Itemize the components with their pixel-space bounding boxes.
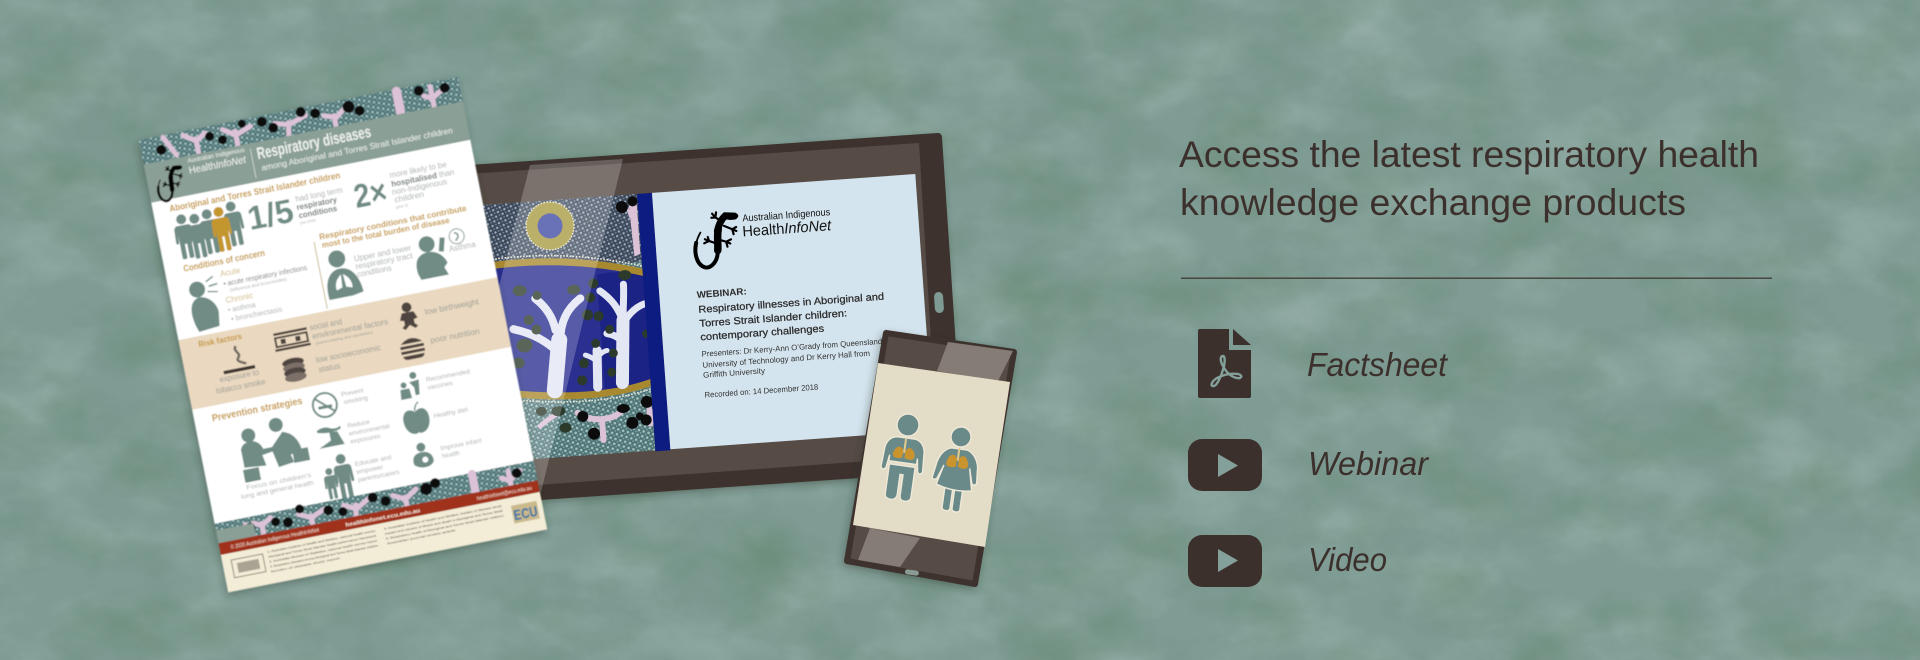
moon circle	[524, 200, 576, 252]
flyer prevention strategies section: Healthy diet	[433, 406, 469, 420]
flyer risk factors band: status	[318, 361, 341, 374]
flyer statistics section: 2×	[351, 172, 390, 215]
tablet glare	[445, 159, 623, 498]
flyer risk factors band: low birthweight	[424, 297, 480, 317]
icon: health consultation	[234, 413, 312, 483]
flyer risk factors band: exposure to	[219, 368, 260, 384]
group of five children	[170, 200, 249, 262]
lungs	[946, 446, 970, 469]
slide logo: HealthInfoNet	[742, 217, 833, 241]
flyer burden of disease section: conditions	[356, 264, 392, 279]
flyer title: Respiratory diseases	[255, 122, 373, 163]
icon: cigarette	[219, 343, 255, 374]
flyer bottom art strip	[214, 458, 538, 544]
slide webinar title: Torres Strait Islander children:	[699, 308, 847, 330]
slide webinar title: WEBINAR:	[696, 286, 747, 301]
flyer burden of disease section	[312, 202, 483, 309]
phone glare top	[937, 342, 1013, 381]
ECU logo: ECU	[512, 503, 539, 524]
label: Factsheet: Factsheet	[1307, 346, 1449, 383]
label: Webinar: Webinar	[1308, 445, 1430, 482]
flyer statistics section: conditions	[298, 204, 338, 220]
flyer top art strip	[139, 76, 463, 165]
factsheet flyer	[139, 76, 547, 592]
lungs	[892, 437, 917, 460]
slide logo: Australian Indigenous	[742, 207, 831, 225]
flyer references panel	[221, 492, 547, 592]
label: Video: Video	[1308, 541, 1387, 578]
flyer conditions of concern section: (influenza and bronchiolitis)	[229, 276, 288, 293]
heading	[1179, 134, 1759, 223]
flyer prevention strategies section: empower	[356, 464, 385, 476]
flyer statistics section: 1/5	[244, 192, 297, 237]
flyer risk factors band: poor nutrition	[430, 327, 480, 345]
phone home button	[905, 569, 919, 576]
flyer risk factors band: Risk factors	[198, 331, 243, 349]
slide presenters: Recorded on: 14 December 2018	[704, 383, 819, 400]
flyer risk factors band: tobacco smoke	[215, 377, 267, 396]
flyer prevention strategies section: vaccines	[427, 380, 454, 392]
figure: girl with lungs	[928, 424, 984, 514]
icon: play button for webinar	[1188, 439, 1262, 491]
flyer references panel: Aboriginal and Torres Strait Islander health performance framework	[268, 533, 377, 559]
flyer statistics section: hospitalised than	[391, 168, 455, 189]
flyer prevention strategies section: Prevention strategies	[211, 396, 304, 425]
slide webinar title: Respiratory illnesses in Aboriginal and	[698, 292, 884, 316]
flyer prevention strategies section: Educate and	[354, 454, 392, 468]
flyer conditions of concern section: Conditions of concern	[182, 248, 266, 275]
slide presenters: Griffith University	[703, 366, 765, 380]
flyer burden of disease section: most to the total burden of disease	[321, 215, 451, 250]
flyer prevention strategies section: Recommended	[425, 368, 471, 384]
flyer statistics section	[168, 148, 461, 262]
icon: crowded housing	[272, 327, 311, 352]
slide webinar title: contemporary challenges	[700, 324, 825, 343]
flyer logo	[153, 148, 252, 202]
divider	[1181, 278, 1772, 279]
phone glare bottom	[858, 528, 920, 567]
icon: coughing child	[186, 276, 226, 333]
flyer header band	[144, 102, 470, 204]
flyer logo: Australian Indigenous	[187, 148, 245, 165]
flyer references panel: 1. Australian Institute of Health and Welfare, national health survey	[267, 529, 376, 554]
icon: PDF document	[1198, 329, 1251, 398]
flyer statistics section: children	[394, 190, 425, 205]
flyer risk factors band: environmental factors	[312, 317, 389, 341]
icon: play button for video	[1188, 535, 1262, 587]
tablet device	[440, 137, 960, 503]
white trees	[511, 283, 651, 393]
flyer prevention strategies section: exposures	[350, 433, 382, 446]
flyer burden of disease section: Asthma	[448, 240, 477, 254]
slide panel	[652, 174, 934, 449]
icon: vaccination	[396, 371, 422, 400]
icon: factory emissions	[315, 424, 345, 449]
flyer logo: HealthInfoNet	[188, 155, 248, 177]
icon: apple	[400, 400, 432, 436]
navy stripe	[637, 193, 670, 451]
icon: parent and child	[319, 452, 358, 502]
flyer statistics section: (est 2018)	[300, 218, 316, 225]
figure: boy with lungs	[877, 411, 930, 503]
slide presenters: Presenters: Dr Kerry-Ann O’Grady from Queensland	[701, 337, 882, 359]
slide presenters: University of Technology and Dr Kerry Hall from	[702, 349, 871, 370]
flyer prevention strategies section: health	[441, 450, 461, 460]
flyer statistics section: (year 3)	[396, 203, 408, 209]
flyer risk factors band: low socioeconomic	[315, 343, 382, 365]
icon: person with lungs	[320, 247, 364, 300]
flyer title: among Aboriginal and Torres Strait Islander children	[260, 125, 454, 173]
flyer references panel: impact and causes of illness and death in Aboriginal and Torres Strait	[385, 509, 503, 536]
flyer burden of disease section: Respiratory conditions that contribute	[318, 203, 468, 242]
icon: baby	[397, 301, 420, 331]
flyer references panel: burden of disease study report	[271, 556, 341, 574]
slide presenters	[701, 337, 885, 400]
heading: knowledge exchange products	[1180, 182, 1686, 223]
flyer references panel: 4. Australian Institute of Health and Welfare, burden of disease study	[384, 504, 503, 531]
tablet screen: webinar slide	[457, 174, 934, 464]
dark foliage	[507, 269, 653, 390]
flyer statistics section: more likely to be	[389, 160, 448, 180]
flyer statistics section: respiratory	[296, 195, 338, 212]
flyer references panel: 2. Australian Bureau of Statistics, national health survey report	[269, 538, 378, 564]
slide webinar title	[696, 277, 886, 343]
flyer references panel: 5. Respiratory health of Aboriginal and Torres Strait Islander children	[386, 513, 505, 541]
flyer references panel: Australian journal review article	[386, 528, 457, 546]
flyer risk factors band	[179, 277, 511, 410]
slide logo	[693, 204, 834, 268]
flyer conditions of concern section	[182, 240, 316, 333]
flyer prevention strategies section: environmental	[348, 423, 391, 438]
flyer prevention strategies section: Improve infant	[440, 437, 482, 452]
flyer prevention strategies section: Reduce	[347, 419, 371, 430]
pink trees and black blobs	[521, 196, 655, 445]
flyer red footer band: © 2020 Australian Indigenous HealthInfoNet	[230, 526, 320, 551]
flyer statistics section: Aboriginal and Torres Strait Islander children	[168, 170, 341, 214]
icon: coins	[281, 356, 308, 384]
artwork panel	[457, 194, 661, 463]
ochre bands	[461, 248, 656, 409]
flyer conditions of concern section: Chronic	[225, 291, 254, 305]
flyer prevention strategies section	[211, 361, 490, 521]
flyer prevention strategies section: parents/carers	[357, 469, 401, 484]
flyer conditions of concern section: • bronchiectasis	[231, 306, 284, 323]
flyer title	[255, 106, 454, 173]
flyer prevention strategies section: Prevent	[341, 387, 364, 399]
phone device	[847, 333, 1014, 584]
flyer prevention strategies section: lung and general health	[241, 480, 315, 501]
icon: child with inhaler	[411, 227, 471, 280]
flyer conditions of concern section: • acute respiratory infections	[223, 265, 308, 288]
flyer burden of disease section: Upper and lower	[353, 243, 412, 263]
icon: burger	[399, 336, 426, 361]
flyer risk factors band: (overcrowding and sanitation)	[315, 329, 374, 346]
tablet side button	[934, 292, 944, 313]
flyer red footer band: healthinfonet.ecu.edu.au	[345, 508, 421, 529]
flyer conditions of concern section: • asthma	[228, 302, 256, 314]
phone screen	[853, 363, 1010, 547]
flyer prevention strategies section: smoking	[343, 395, 369, 406]
heading: Access the latest respiratory health	[1179, 134, 1759, 175]
flyer statistics section: non-Indigenous	[391, 177, 448, 197]
flyer statistics section: had long term	[295, 186, 344, 204]
flyer red footer band	[219, 480, 540, 555]
flyer references panel: 3. Respiratory diseases among Aboriginal and Torres Strait Islander children	[270, 543, 379, 569]
icon: no smoking	[311, 391, 339, 419]
icon: mother and infant	[410, 441, 435, 469]
flyer burden of disease section: respiratory tract	[355, 251, 414, 271]
flyer risk factors band: social and	[309, 317, 343, 332]
flyer red footer band: healthinfonet@ecu.edu.au	[476, 485, 533, 502]
flyer conditions of concern section: Acute	[219, 266, 242, 279]
flyer prevention strategies section: Focus on children’s	[246, 472, 313, 492]
